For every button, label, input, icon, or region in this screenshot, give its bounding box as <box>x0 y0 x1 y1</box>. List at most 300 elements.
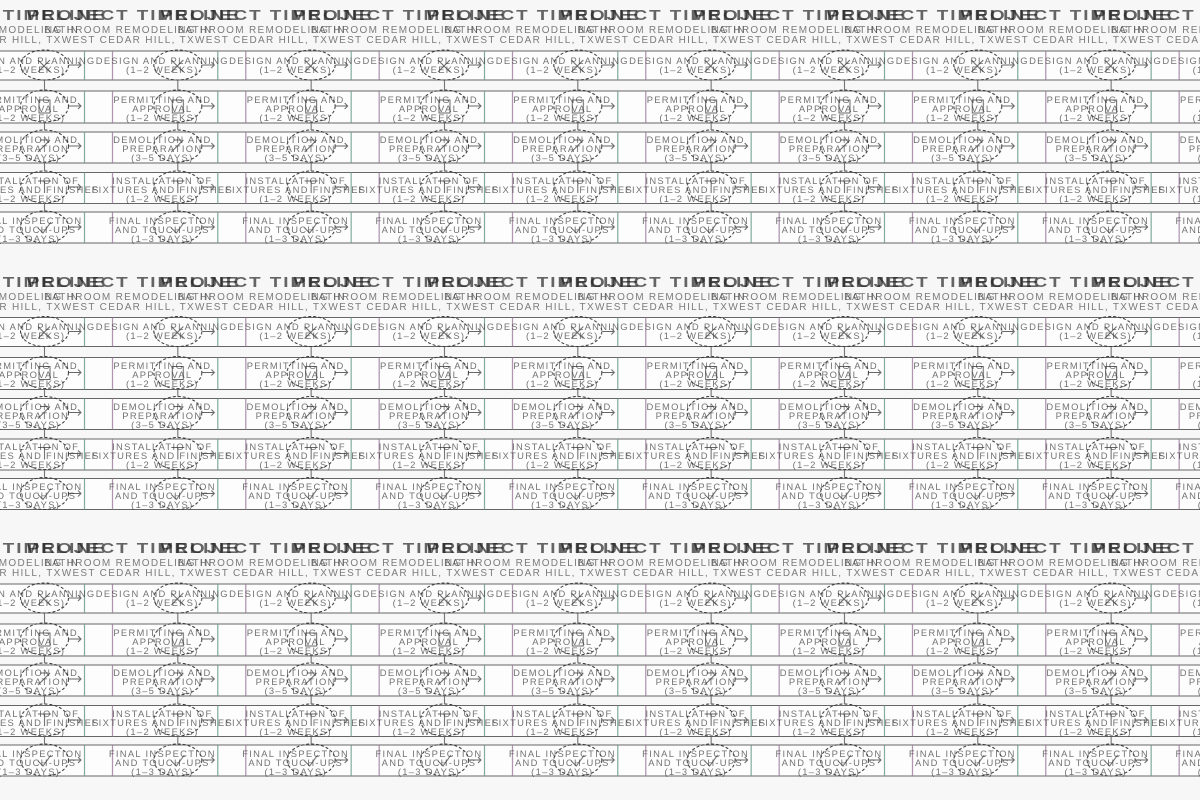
panel: tile r2c6 <box>560 274 773 510</box>
panel: tile r1c4: DESIGN AND PLANNING <box>362 54 496 66</box>
panel: tile r1c6: DEMOLITION AND <box>646 134 745 145</box>
panel: tile r2c8: INSTALLATION OF <box>912 441 1013 452</box>
panel: tile r3c4: (1–2 WEEKS) <box>393 597 465 608</box>
panel: tile r1c7: (1–2 WEEKS) <box>793 112 865 123</box>
panel: tile r2c2: PROJECT TIMELINE <box>27 274 240 290</box>
panel: tile r2c7: WEST CEDAR HILL, TX <box>728 302 862 312</box>
panel: tile r3c9: DEMOLITION AND <box>1046 667 1145 678</box>
panel: tile r2c4: (3–5 DAYS) <box>398 419 460 430</box>
panel: tile r2c3: DEMOLITION AND <box>246 400 345 412</box>
panel: tile r2c4 <box>293 274 507 510</box>
panel: tile r1c3: PREPARATION <box>256 143 336 154</box>
panel: tile r2c6: INSTALLATION OF <box>645 441 746 452</box>
panel: tile r3c6: PROJECT TIMELINE <box>560 541 773 557</box>
panel: tile r1c4: WEST CEDAR HILL, TX <box>328 35 462 46</box>
panel: tile r3c6: FINAL INSPECTION <box>642 748 749 758</box>
panel: tile r3c8: DEMOLITION AND <box>913 667 1012 678</box>
panel: tile r1c7 <box>693 8 907 244</box>
panel: tile r2c6: (1–2 WEEKS) <box>659 330 732 341</box>
panel: tile r3c5: FINAL INSPECTION <box>509 748 616 758</box>
panel: tile r2c8: (1–2 WEEKS) <box>926 459 999 470</box>
panel: tile r2c5: WEST CEDAR HILL, TX <box>462 302 595 312</box>
panel: tile r2c6: (1–2 WEEKS) <box>659 378 732 389</box>
panel: tile r1c8: (1–2 WEEKS) <box>926 112 999 123</box>
panel: tile r3c4: BATHROOM REMODELING IN <box>311 558 479 569</box>
panel: tile r3c6: FIXTURES AND FINISHES <box>625 717 766 728</box>
panel: tile r1c4: AND TOUCH-UPS <box>382 224 476 235</box>
panel: tile r3c8: FIXTURES AND FINISHES <box>892 717 1033 728</box>
panel: tile r3c5: BATHROOM REMODELING IN <box>444 558 613 569</box>
panel: tile r1c8 <box>827 8 1040 244</box>
panel: tile r3c7: WEST CEDAR HILL, TX <box>728 568 862 579</box>
panel: tile r1c4: PROJECT TIMELINE <box>293 8 507 24</box>
panel: tile r3c7: DESIGN AND PLANNING <box>762 588 896 598</box>
panel: tile r1c3: FINAL INSPECTION <box>242 214 349 226</box>
panel: tile r1c6: (1–2 WEEKS) <box>659 64 732 75</box>
panel: tile r3c4: FINAL INSPECTION <box>376 748 482 758</box>
panel: tile r1c3: PROJECT TIMELINE <box>160 8 373 24</box>
panel: tile r1c7: DEMOLITION AND <box>780 134 878 145</box>
panel: tile r1c6: WEST CEDAR HILL, TX <box>595 35 728 46</box>
panel: tile r2c5: APPROVAL <box>532 369 592 380</box>
panel: tile r2c4: DEMOLITION AND <box>380 400 478 412</box>
panel: tile r2c9: AND TOUCH-UPS <box>1048 490 1143 501</box>
panel: tile r2c2: BATHROOM REMODELING IN <box>44 292 213 302</box>
panel: tile r1c8: PROJECT TIMELINE <box>827 8 1040 24</box>
panel: tile r1c9 <box>960 8 1173 244</box>
panel: tile r1c2: (1–2 WEEKS) <box>126 193 199 204</box>
panel: tile r3c3: BATHROOM REMODELING IN <box>177 558 346 569</box>
panel: tile r2c6: DEMOLITION AND <box>646 400 745 412</box>
panel: tile r1c6: FINAL INSPECTION <box>642 214 749 226</box>
panel: tile r3c5: PERMITTING AND <box>513 626 611 638</box>
panel: tile r3c7: (1–3 DAYS) <box>798 766 860 777</box>
panel: tile r1c4 <box>293 8 507 244</box>
panel: tile r3c6: (1–2 WEEKS) <box>659 597 732 608</box>
panel: tile r1c4: FINAL INSPECTION <box>376 214 482 226</box>
panel: tile r2c8: WEST CEDAR HILL, TX <box>862 302 995 312</box>
panel: tile r1c1 <box>0 8 107 244</box>
panel: tile r3c5: (1–2 WEEKS) <box>526 726 599 737</box>
panel: tile r2c5: (1–2 WEEKS) <box>526 459 599 470</box>
panel: tile r3c8: PREPARATION <box>922 676 1002 687</box>
panel: tile r2c7: INSTALLATION OF <box>779 441 879 452</box>
panel: tile r2c5: AND TOUCH-UPS <box>515 490 610 501</box>
panel: tile r1c8: DESIGN AND PLANNING <box>896 54 1029 66</box>
panel: tile r1c5: (1–2 WEEKS) <box>526 64 599 75</box>
panel: tile r2c9: (1–3 DAYS) <box>1064 499 1127 510</box>
panel: tile r3c10 <box>1093 541 1200 777</box>
panel: tile r1c7: AND TOUCH-UPS <box>782 224 876 235</box>
panel: tile r3c8: PERMITTING AND <box>913 626 1011 638</box>
panel: tile r2c3: INSTALLATION OF <box>245 441 346 452</box>
panel: tile r1c9: (1–2 WEEKS) <box>1059 193 1132 204</box>
panel: tile r1c5: DEMOLITION AND <box>513 134 612 145</box>
panel: tile r1c9: PREPARATION <box>1056 143 1136 154</box>
panel: tile r2c8: (1–2 WEEKS) <box>926 378 999 389</box>
panel: tile r2c2: (3–5 DAYS) <box>131 419 194 430</box>
panel: tile r2c5: (3–5 DAYS) <box>531 419 593 430</box>
panel: tile r2c2: FIXTURES AND FINISHES <box>92 450 233 461</box>
panel: tile r2c8: PERMITTING AND <box>913 360 1011 371</box>
panel: tile r3c3: APPROVAL <box>266 636 326 647</box>
panel: tile r3c5: PREPARATION <box>522 676 602 687</box>
panel: tile r1c7: PREPARATION <box>789 143 869 154</box>
panel: tile r2c4: PREPARATION <box>389 410 469 421</box>
panel: tile r2c2: AND TOUCH-UPS <box>115 490 210 501</box>
panel: tile r2c9: FINAL INSPECTION <box>1042 481 1149 492</box>
panel: tile r1c3: WEST CEDAR HILL, TX <box>195 35 328 46</box>
panel: tile r1c5: (1–2 WEEKS) <box>526 112 599 123</box>
panel: tile r1c4: (1–3 DAYS) <box>398 233 460 244</box>
panel: tile r3c5: (1–2 WEEKS) <box>526 645 599 656</box>
panel: tile r3c8: (1–2 WEEKS) <box>926 726 999 737</box>
panel: tile r1c4: APPROVAL <box>399 103 459 114</box>
panel: tile r1c9: (3–5 DAYS) <box>1064 152 1127 163</box>
panel: tile r2c3: DESIGN AND PLANNING <box>229 321 362 332</box>
panel: tile r1c6: (1–3 DAYS) <box>664 233 727 244</box>
panel: tile r3c9: BATHROOM REMODELING IN <box>977 558 1146 569</box>
panel: tile r2c5: BATHROOM REMODELING IN <box>444 292 613 302</box>
panel: tile r1c10 <box>1093 8 1200 244</box>
panel: tile r3c2: (1–2 WEEKS) <box>126 645 199 656</box>
panel: tile r3c2: (1–2 WEEKS) <box>126 726 199 737</box>
panel: tile r3c3: PREPARATION <box>256 676 336 687</box>
panel: tile r3c7: BATHROOM REMODELING IN <box>711 558 879 569</box>
panel: tile r1c8: APPROVAL <box>932 103 992 114</box>
panel: tile r3c6: PERMITTING AND <box>647 626 745 638</box>
panel: tile r3c8: DESIGN AND PLANNING <box>896 588 1029 598</box>
panel: tile r2c7: (1–2 WEEKS) <box>793 378 865 389</box>
panel: tile r3c8: (1–2 WEEKS) <box>926 597 999 608</box>
panel: tile r1c6: (1–2 WEEKS) <box>659 112 732 123</box>
panel: tile r3c4: AND TOUCH-UPS <box>382 757 476 768</box>
panel: tile r2c4: FINAL INSPECTION <box>376 481 482 492</box>
panel: tile r1c5: DESIGN AND PLANNING <box>496 54 629 66</box>
panel: tile r1c8: (1–2 WEEKS) <box>926 64 999 75</box>
panel: tile r3c3: AND TOUCH-UPS <box>248 757 343 768</box>
panel: tile r2c8: (1–2 WEEKS) <box>926 330 999 341</box>
panel: tile r2c7: DEMOLITION AND <box>780 400 878 412</box>
panel: tile r1c2: (1–2 WEEKS) <box>126 112 199 123</box>
panel: tile r2c6: PREPARATION <box>656 410 736 421</box>
panel: tile r2c4: AND TOUCH-UPS <box>382 490 476 501</box>
panel: tile r3c9: PERMITTING AND <box>1047 626 1145 638</box>
panel: tile r2c6: DESIGN AND PLANNING <box>629 321 762 332</box>
panel: tile r2c3 <box>160 274 373 510</box>
panel: tile r3c6 <box>560 541 773 777</box>
panel: tile r3c3: PROJECT TIMELINE <box>160 541 373 557</box>
panel: tile r3c3 <box>160 541 373 777</box>
panel: tile r3c2: PROJECT TIMELINE <box>27 541 240 557</box>
panel: tile r1c2: PROJECT TIMELINE <box>27 8 240 24</box>
panel: tile r2c2: DEMOLITION AND <box>113 400 212 412</box>
panel: tile r2c4: WEST CEDAR HILL, TX <box>328 302 462 312</box>
panel: tile r3c5: (1–3 DAYS) <box>531 766 593 777</box>
panel: tile r1c3: APPROVAL <box>266 103 326 114</box>
panel: tile r1c3: PERMITTING AND <box>247 94 345 104</box>
panel: tile r1c3: (1–2 WEEKS) <box>259 193 332 204</box>
panel: tile r1c2: PREPARATION <box>122 143 202 154</box>
panel: tile r3c2: FIXTURES AND FINISHES <box>92 717 233 728</box>
panel: tile r1c3: (1–2 WEEKS) <box>259 112 332 123</box>
panel: tile r2c10 <box>1093 274 1200 510</box>
panel: tile r3c8: INSTALLATION OF <box>912 708 1013 718</box>
panel: tile r1c3: INSTALLATION OF <box>245 174 346 186</box>
panel: tile r2c8: PROJECT TIMELINE <box>827 274 1040 290</box>
panel: tile r3c2: AND TOUCH-UPS <box>115 757 210 768</box>
panel: tile r2c3: WEST CEDAR HILL, TX <box>195 302 328 312</box>
panel: tile r1c2: BATHROOM REMODELING IN <box>44 25 213 36</box>
panel: tile r2c8: FINAL INSPECTION <box>909 481 1016 492</box>
panel: tile r2c4: (1–2 WEEKS) <box>393 330 465 341</box>
panel: tile r3c6: INSTALLATION OF <box>645 708 746 718</box>
panel: tile r3c2: DESIGN AND PLANNING <box>96 588 229 598</box>
panel: tile r1c7: INSTALLATION OF <box>779 174 879 186</box>
panel: tile r1c9: (1–3 DAYS) <box>1064 233 1127 244</box>
panel: tile r3c6: WEST CEDAR HILL, TX <box>595 568 728 579</box>
panel: tile r2c9 <box>960 274 1173 510</box>
panel: tile r1c5: PREPARATION <box>522 143 602 154</box>
panel: tile r1c2: AND TOUCH-UPS <box>115 224 210 235</box>
panel: tile r2c8: BATHROOM REMODELING IN <box>844 292 1013 302</box>
panel: tile r3c3: DEMOLITION AND <box>246 667 345 678</box>
panel: tile r2c6: (3–5 DAYS) <box>664 419 727 430</box>
panel: tile r2c5: (1–2 WEEKS) <box>526 330 599 341</box>
panel: tile r1c6: (3–5 DAYS) <box>664 152 727 163</box>
panel: tile r1c7: PROJECT TIMELINE <box>693 8 907 24</box>
panel: tile r2c7: PERMITTING AND <box>780 360 878 371</box>
panel: tile r2c5: PROJECT TIMELINE <box>427 274 640 290</box>
panel: tile r1c2: INSTALLATION OF <box>112 174 213 186</box>
panel: tile r1c8: (1–2 WEEKS) <box>926 193 999 204</box>
panel: tile r1c4: (1–2 WEEKS) <box>393 193 465 204</box>
panel: tile r3c7: PROJECT TIMELINE <box>693 541 907 557</box>
panel: tile r1c5: INSTALLATION OF <box>512 174 613 186</box>
panel: tile r1c3: (1–3 DAYS) <box>264 233 327 244</box>
panel: tile r3c3: (1–2 WEEKS) <box>259 597 332 608</box>
panel: tile r2c7: AND TOUCH-UPS <box>782 490 876 501</box>
panel: tile r1c9: (1–2 WEEKS) <box>1059 64 1132 75</box>
panel: tile r2c3: (1–2 WEEKS) <box>259 378 332 389</box>
panel: tile r1c3 <box>160 8 373 244</box>
panel: tile r3c3: PERMITTING AND <box>247 626 345 638</box>
panel: tile r1c9: PROJECT TIMELINE <box>960 8 1173 24</box>
panel: tile r3c9: DESIGN AND PLANNING <box>1029 588 1162 598</box>
panel: tile r3c6: BATHROOM REMODELING IN <box>577 558 746 569</box>
panel: tile r3c8: WEST CEDAR HILL, TX <box>862 568 995 579</box>
panel: tile r2c5: PREPARATION <box>522 410 602 421</box>
panel: tile r2c2: (1–2 WEEKS) <box>126 459 199 470</box>
panel: tile r3c2: PERMITTING AND <box>113 626 211 638</box>
panel: tile r2c9: PERMITTING AND <box>1047 360 1145 371</box>
panel: tile r1c2 <box>27 8 240 244</box>
panel: tile r1c4: (1–2 WEEKS) <box>393 112 465 123</box>
panel: tile r2c6: PERMITTING AND <box>647 360 745 371</box>
panel: tile r1c4: BATHROOM REMODELING IN <box>311 25 479 36</box>
panel: tile r1c8: AND TOUCH-UPS <box>915 224 1010 235</box>
panel: tile r1c7: FINAL INSPECTION <box>776 214 882 226</box>
panel: tile r3c7: (3–5 DAYS) <box>798 685 860 696</box>
panel: tile r3c2 <box>27 541 240 777</box>
panel: tile r2c3: PERMITTING AND <box>247 360 345 371</box>
panel: tile r2c4: APPROVAL <box>399 369 459 380</box>
panel: tile r3c9: (1–2 WEEKS) <box>1059 726 1132 737</box>
panel: tile r1c6 <box>560 8 773 244</box>
panel: tile r2c4: PROJECT TIMELINE <box>293 274 507 290</box>
panel: tile r3c2: APPROVAL <box>132 636 192 647</box>
panel: tile r1c3: AND TOUCH-UPS <box>248 224 343 235</box>
panel: tile r2c7: (1–3 DAYS) <box>798 499 860 510</box>
panel: tile r1c6: APPROVAL <box>666 103 726 114</box>
panel: tile r2c3: PREPARATION <box>256 410 336 421</box>
panel: tile r2c2: (1–2 WEEKS) <box>126 330 199 341</box>
panel: tile r3c1: APPROVAL <box>0 636 59 647</box>
panel: tile r1c9: (1–2 WEEKS) <box>1059 112 1132 123</box>
panel: tile r3c4: (1–2 WEEKS) <box>393 645 465 656</box>
panel: tile r2c8: DESIGN AND PLANNING <box>896 321 1029 332</box>
panel: tile r3c4: PREPARATION <box>389 676 469 687</box>
panel: tile r1c3: BATHROOM REMODELING IN <box>177 25 346 36</box>
panel: tile r3c4: PROJECT TIMELINE <box>293 541 507 557</box>
panel: tile r3c4 <box>293 541 507 777</box>
panel: tile r1c5: PROJECT TIMELINE <box>427 8 640 24</box>
panel: tile r3c4: APPROVAL <box>399 636 459 647</box>
panel: tile r1c5: PERMITTING AND <box>513 94 611 104</box>
panel: tile r3c9: FINAL INSPECTION <box>1042 748 1149 758</box>
panel: tile r2c9: WEST CEDAR HILL, TX <box>995 302 1128 312</box>
panel: tile r1c2: PERMITTING AND <box>113 94 211 104</box>
panel: tile r2c8 <box>827 274 1040 510</box>
panel: tile r2c9: FIXTURES AND FINISHES <box>1025 450 1166 461</box>
panel: tile r3c7: (1–2 WEEKS) <box>793 726 865 737</box>
panel: tile r1c4: FIXTURES AND FINISHES <box>358 184 500 195</box>
panel: tile r3c2: DEMOLITION AND <box>113 667 212 678</box>
panel: tile r3c6: (1–2 WEEKS) <box>659 726 732 737</box>
panel: tile r1c2: (1–3 DAYS) <box>131 233 194 244</box>
panel: tile r1c9: DESIGN AND PLANNING <box>1029 54 1162 66</box>
panel: tile r1c5: (3–5 DAYS) <box>531 152 593 163</box>
panel: tile r3c4: DEMOLITION AND <box>380 667 478 678</box>
panel: tile r3c7 <box>693 541 907 777</box>
panel: tile r1c9: FIXTURES AND FINISHES <box>1025 184 1166 195</box>
panel: tile r2c7: BATHROOM REMODELING IN <box>711 292 879 302</box>
panel: tile r3c2: BATHROOM REMODELING IN <box>44 558 213 569</box>
panel: tile r1c6: PREPARATION <box>656 143 736 154</box>
panel: tile r2c2: INSTALLATION OF <box>112 441 213 452</box>
panel: tile r1c3: FIXTURES AND FINISHES <box>225 184 366 195</box>
panel: tile r1c8: PERMITTING AND <box>913 94 1011 104</box>
panel: tile r3c4: INSTALLATION OF <box>379 708 479 718</box>
panel: tile r3c8: AND TOUCH-UPS <box>915 757 1010 768</box>
panel: tile r2c2: PERMITTING AND <box>113 360 211 371</box>
panel: tile r3c9: PROJECT TIMELINE <box>960 541 1173 557</box>
panel: tile r3c5: FIXTURES AND FINISHES <box>492 717 633 728</box>
panel: tile r2c7 <box>693 274 907 510</box>
panel: tile r3c5: DEMOLITION AND <box>513 667 612 678</box>
panel: tile r3c8: PROJECT TIMELINE <box>827 541 1040 557</box>
panel: tile r1c6: INSTALLATION OF <box>645 174 746 186</box>
panel: tile r2c2: PREPARATION <box>122 410 202 421</box>
panel: tile r2c3: PROJECT TIMELINE <box>160 274 373 290</box>
panel: tile r3c2: INSTALLATION OF <box>112 708 213 718</box>
panel: tile r3c6: PREPARATION <box>656 676 736 687</box>
panel: tile r3c4: FIXTURES AND FINISHES <box>358 717 500 728</box>
panel: tile r3c7: (1–2 WEEKS) <box>793 645 865 656</box>
panel: tile r3c3: FINAL INSPECTION <box>242 748 349 758</box>
panel: tile r2c9: (3–5 DAYS) <box>1064 419 1127 430</box>
panel: tile r3c3: FIXTURES AND FINISHES <box>225 717 366 728</box>
panel: tile r2c8: AND TOUCH-UPS <box>915 490 1010 501</box>
panel: tile r1c3: (3–5 DAYS) <box>264 152 327 163</box>
panel: tile r1c8: FINAL INSPECTION <box>909 214 1016 226</box>
panel: tile r3c7: APPROVAL <box>799 636 859 647</box>
panel: tile r3c7: AND TOUCH-UPS <box>782 757 876 768</box>
panel: tile r2c8: PREPARATION <box>922 410 1002 421</box>
panel: tile r1c5: (1–2 WEEKS) <box>526 193 599 204</box>
panel: tile r1c5: FINAL INSPECTION <box>509 214 616 226</box>
panel: tile r1c6: (1–2 WEEKS) <box>659 193 732 204</box>
panel: tile r3c9: PREPARATION <box>1056 676 1136 687</box>
panel: tile r2c5: FIXTURES AND FINISHES <box>492 450 633 461</box>
panel: tile r1c9: PERMITTING AND <box>1047 94 1145 104</box>
panel: tile r2c9: PROJECT TIMELINE <box>960 274 1173 290</box>
panel: tile r2c2 <box>27 274 240 510</box>
panel: tile r2c2: (1–3 DAYS) <box>131 499 194 510</box>
panel: tile r1c4: PERMITTING AND <box>380 94 478 104</box>
panel: tile r3c9: WEST CEDAR HILL, TX <box>995 568 1128 579</box>
panel: tile r3c6: DEMOLITION AND <box>646 667 745 678</box>
panel: tile r2c3: BATHROOM REMODELING IN <box>177 292 346 302</box>
panel: tile r3c7: (1–2 WEEKS) <box>793 597 865 608</box>
panel: tile r1c7: (3–5 DAYS) <box>798 152 860 163</box>
panel: tile r1c5: AND TOUCH-UPS <box>515 224 610 235</box>
panel: tile r3c9: AND TOUCH-UPS <box>1048 757 1143 768</box>
panel: tile r3c3: INSTALLATION OF <box>245 708 346 718</box>
panel: tile r2c6: AND TOUCH-UPS <box>648 490 743 501</box>
panel: tile r2c9: PREPARATION <box>1056 410 1136 421</box>
panel: tile r3c9: INSTALLATION OF <box>1045 708 1146 718</box>
panel: tile r3c7: FIXTURES AND FINISHES <box>758 717 900 728</box>
panel: tile r2c5: INSTALLATION OF <box>512 441 613 452</box>
panel: tile r2c7: APPROVAL <box>799 369 859 380</box>
panel: tile r2c5 <box>427 274 640 510</box>
panel: tile r1c2: FINAL INSPECTION <box>109 214 216 226</box>
panel: tile r2c3: AND TOUCH-UPS <box>248 490 343 501</box>
panel: tile r3c2: (1–2 WEEKS) <box>126 597 199 608</box>
panel: tile r2c4: (1–3 DAYS) <box>398 499 460 510</box>
panel: tile r1c7: APPROVAL <box>799 103 859 114</box>
panel: tile r2c8: FIXTURES AND FINISHES <box>892 450 1033 461</box>
panel: tile r1c6: DESIGN AND PLANNING <box>629 54 762 66</box>
panel: tile r2c1 <box>0 274 107 510</box>
panel: tile r3c4: (1–2 WEEKS) <box>393 726 465 737</box>
panel: tile r3c5: (1–2 WEEKS) <box>526 597 599 608</box>
panel: tile r1c4: PREPARATION <box>389 143 469 154</box>
panel: tile r1c3: DESIGN AND PLANNING <box>229 54 362 66</box>
panel: tile r1c7: WEST CEDAR HILL, TX <box>728 35 862 46</box>
panel: tile r1c9: BATHROOM REMODELING IN <box>977 25 1146 36</box>
panel: tile r2c7: FINAL INSPECTION <box>776 481 882 492</box>
panel: tile r3c6: DESIGN AND PLANNING <box>629 588 762 598</box>
panel: tile r2c2: (1–2 WEEKS) <box>126 378 199 389</box>
panel: tile r1c9: APPROVAL <box>1066 103 1126 114</box>
panel: tile r2c4: (1–2 WEEKS) <box>393 378 465 389</box>
panel: tile r2c2: APPROVAL <box>132 369 192 380</box>
panel: tile r2c6: (1–2 WEEKS) <box>659 459 732 470</box>
panel: tile r1c6: PROJECT TIMELINE <box>560 8 773 24</box>
panel: tile r1c6: PERMITTING AND <box>647 94 745 104</box>
